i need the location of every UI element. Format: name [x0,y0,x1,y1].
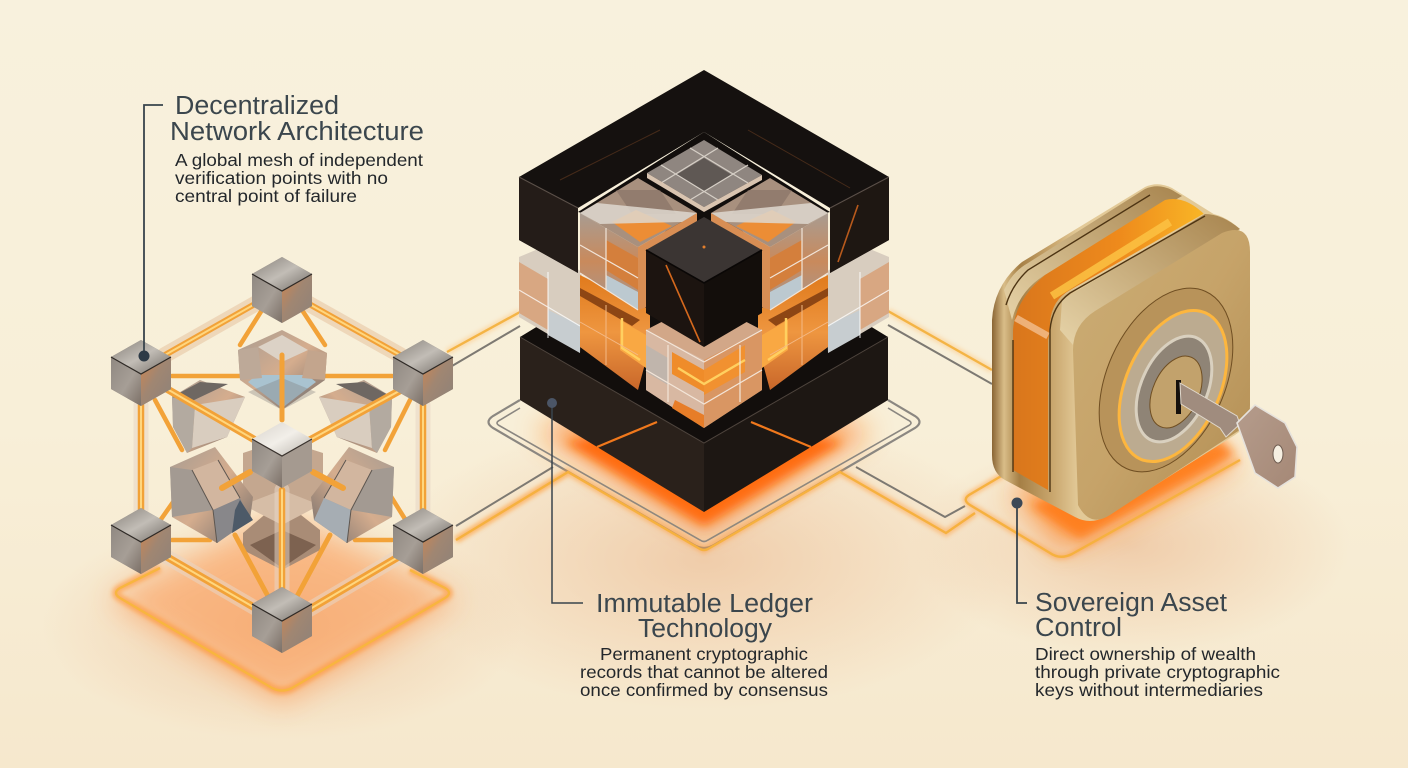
key shaft [1180,383,1240,437]
icon: sovereign gold lock with key [992,184,1297,521]
description: keys without intermediaries [1035,680,1263,700]
description: once confirmed by consensus [580,680,828,700]
icon: immutable ledger cube [519,70,889,512]
orange core right [758,275,828,390]
top slab [519,70,889,273]
front face [1073,230,1250,520]
floor glow under lattice [108,510,458,705]
description: Direct ownership of wealth [1035,644,1256,664]
crystal: lower right [311,447,394,543]
glass cube upper left [580,178,697,310]
callout lines and dots [138,105,1027,603]
crystal: top [238,330,327,410]
glass layer right [826,247,889,353]
amber glass band [1013,199,1205,490]
crystal: upper left [172,380,245,453]
description: central point of failure [175,186,357,206]
front plate top edge [1060,214,1240,345]
key hole [1273,445,1283,463]
description [175,150,423,206]
description: verification points with no [175,168,388,188]
glass layer left [519,247,582,353]
glass tile back [647,140,762,212]
metal node: bottom left [111,508,171,574]
glass cube upper right [711,178,828,310]
crystal: centre block [243,440,323,520]
metal node: right [393,340,453,406]
dark core cube [646,217,762,347]
icon: crystal lattice network [111,257,453,653]
heading: Network Architecture [170,118,424,146]
description: through private cryptographic [1035,662,1280,682]
back rods [150,300,415,540]
text block: immutable ledger technology [580,590,828,700]
inner ring [1121,324,1227,454]
crystal: upper right [319,380,392,453]
floor pad under ledger cube [456,390,975,550]
description [1035,644,1280,700]
metal node: left [111,340,171,406]
orange core left [580,275,650,390]
connector lines between objects [447,311,992,540]
description: records that cannot be altered [580,662,828,682]
heading: Immutable Ledger [596,590,814,618]
heading: Sovereign Asset [1035,589,1227,617]
description [580,644,828,700]
metal node: bottom [252,587,312,653]
heading: Technology [638,615,772,643]
crystal: lower left [170,447,253,543]
key head [1237,405,1297,488]
heading: Decentralized [175,92,339,120]
glowing ring [1098,294,1248,478]
back plate top edge [1004,186,1182,320]
metal node: bottom right [393,508,453,574]
heading [1035,589,1227,642]
text block: sovereign asset control [1035,589,1280,700]
front rods [141,300,423,612]
metal node: top [252,257,312,323]
metal node: centre [252,422,312,488]
outer disc [1073,267,1259,493]
heading: Control [1035,614,1122,642]
text block: decentralized network architecture [170,92,424,206]
soft floor tint [42,410,1350,740]
description: Permanent cryptographic [600,644,808,664]
keyhole [1176,380,1181,414]
bottom slab [520,225,888,512]
floor glow under lock [966,430,1240,557]
heading [170,92,424,146]
front plate side [1050,213,1240,510]
groove lines [1006,195,1205,492]
description: A global mesh of independent [175,150,423,170]
heading [596,590,814,643]
crystal: lower centre [243,490,320,570]
glass cube front [646,300,762,428]
band highlights [1052,222,1170,296]
keyhole disc [1140,348,1212,436]
lock body [992,184,1250,521]
